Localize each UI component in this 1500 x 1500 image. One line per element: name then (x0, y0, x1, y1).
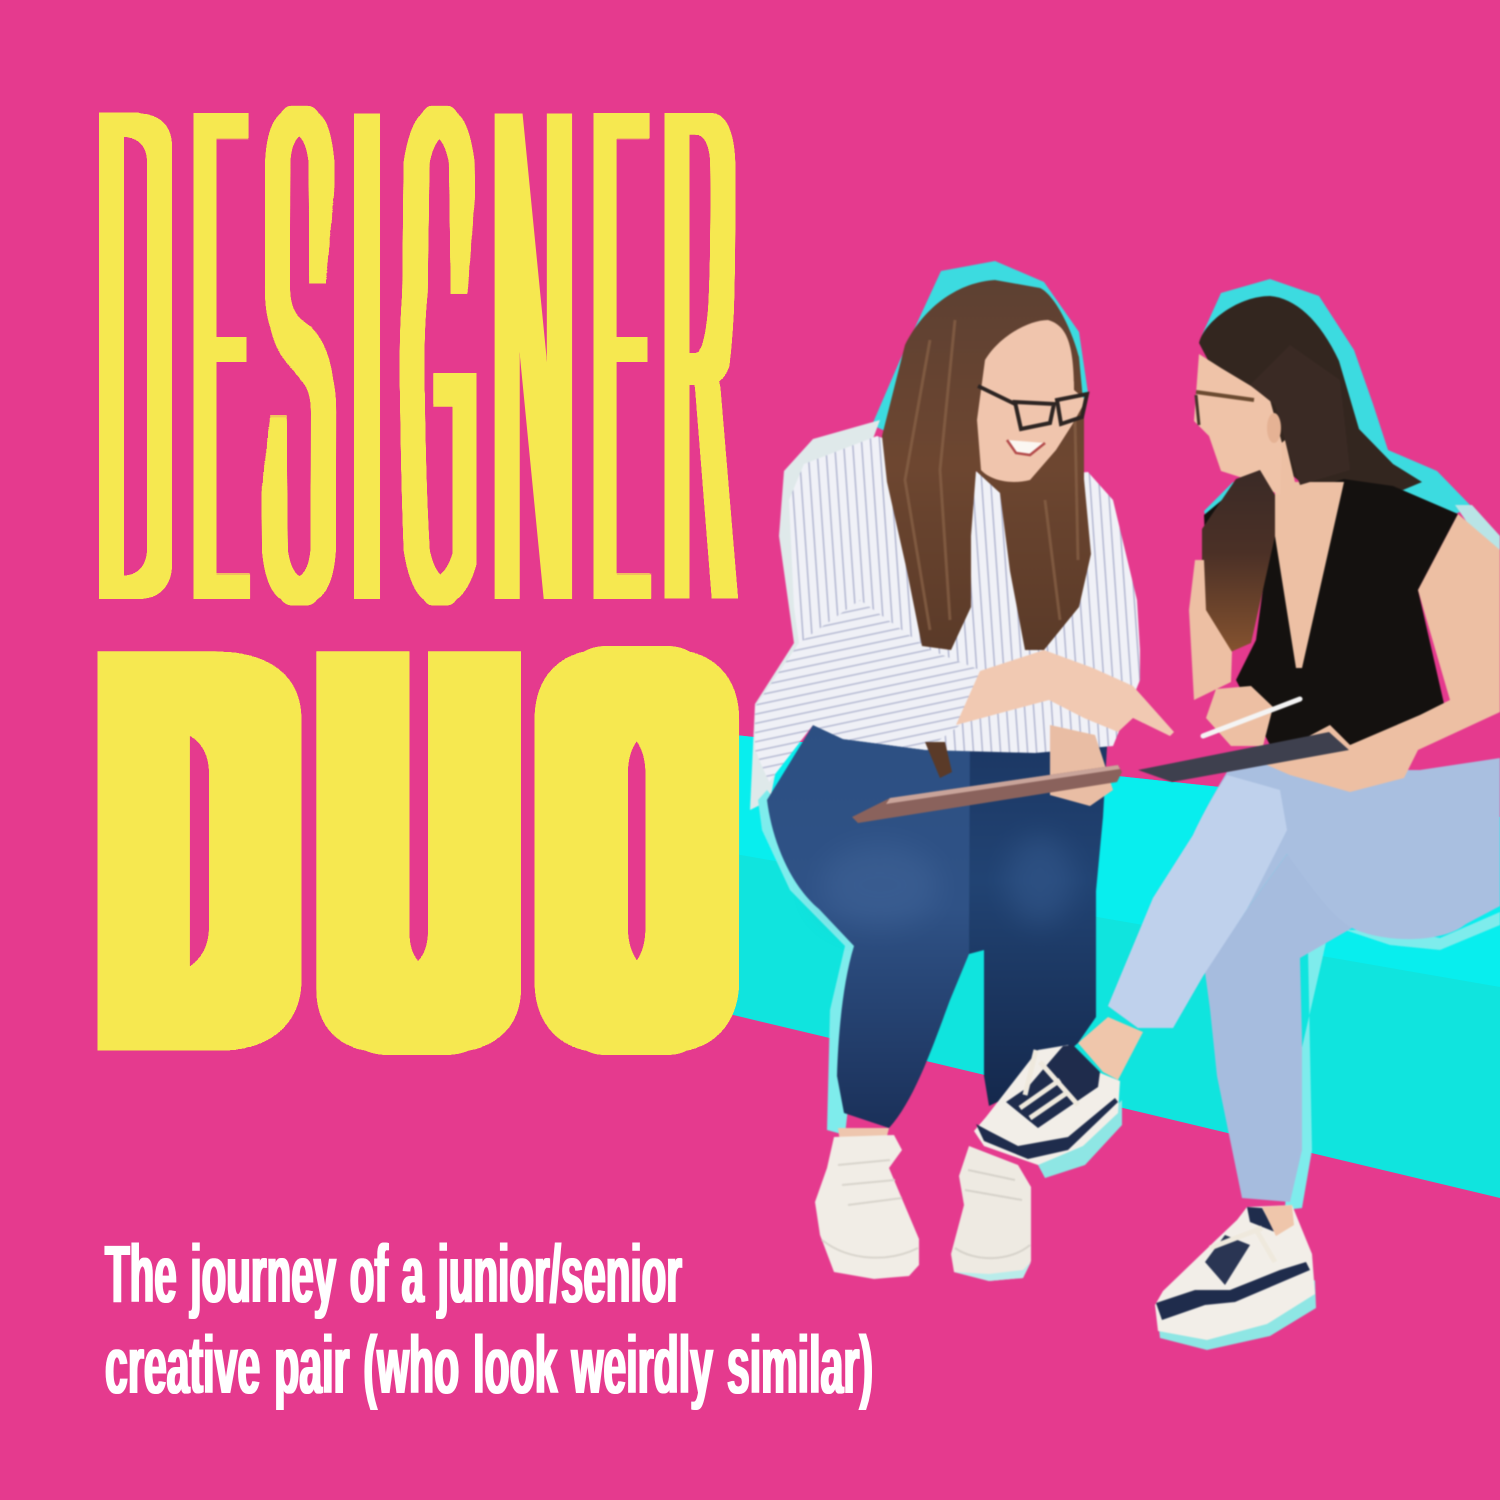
person two: hair front (1202, 345, 1350, 654)
person two: arms and hand (1189, 514, 1500, 792)
cyan diagonal band (725, 735, 1500, 1198)
photo: two designers sitting (750, 261, 1500, 1350)
subtitle: The journey of a junior/senior (105, 1229, 682, 1320)
title: DUO (100, 570, 738, 1131)
title: DUO: U (331, 570, 508, 1130)
person two: lower standing leg (1205, 854, 1352, 1202)
person two: crossed leg and thigh (1108, 758, 1500, 1028)
person two: halo (1202, 279, 1500, 1210)
person one: lower hand (1050, 725, 1113, 806)
person two: chest and neck (1246, 440, 1344, 668)
person two: crossed shoe (974, 1045, 1122, 1178)
person two: face (1194, 354, 1282, 495)
person one: legs, dark jeans (767, 725, 1108, 1128)
person one: halo (750, 261, 1088, 1135)
person two: black top (1204, 479, 1458, 752)
person one: pointing arm (956, 650, 1174, 736)
title: DESIGNER (96, 0, 744, 750)
person two: tablet (1138, 732, 1349, 782)
title: DUO: D (111, 571, 283, 1131)
person two: hair back (1199, 296, 1422, 490)
person one: left white shoe (815, 1128, 919, 1279)
person one: right white shoe (951, 1146, 1031, 1281)
person two: standing shoe (1155, 1205, 1316, 1350)
person one: rose gold tablet (852, 765, 1122, 823)
person one: shirt (755, 436, 1140, 782)
title: DUO: O (559, 571, 716, 1131)
person one: face with glasses and smile (977, 320, 1087, 482)
person one: hair (882, 280, 1091, 778)
person two: stylus (1203, 699, 1300, 736)
person two: ankle (1078, 1017, 1143, 1080)
subtitle (105, 1229, 873, 1411)
